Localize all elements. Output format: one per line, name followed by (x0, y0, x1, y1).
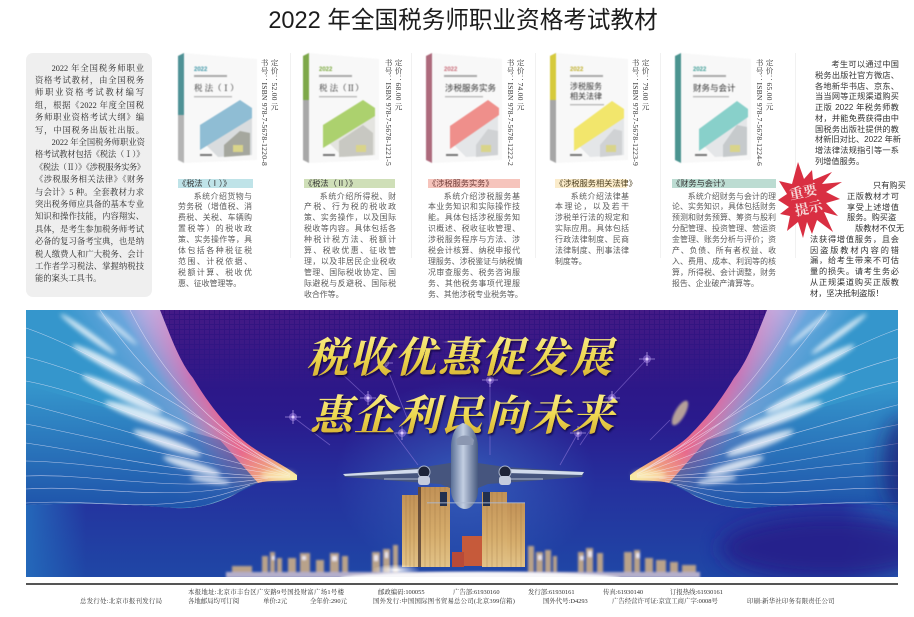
text block: purchase channels: 国税务出版社提供的教 (815, 124, 899, 134)
price and ISBN: 书号：ISBN 978-7-5678-1223-9 (631, 59, 640, 166)
text block: 财务与会计: 产、负债、所有者权益、收 (672, 246, 776, 255)
text block: 涉税服务相关法律: 系统介绍法律基 (571, 192, 629, 200)
footer: publication information: 国外发行:中国国际图书贸易总公司(北京399信箱) (373, 598, 515, 605)
text block: 税法（Ⅱ）: 策、实务操作，以及国际 (304, 213, 396, 222)
text block: 财务与会计: 金管理、账务分析与评价；资 (672, 235, 776, 244)
price and ISBN: 书号：ISBN 978-7-5678-1220-8 (260, 59, 269, 166)
icon: book cover 税法（Ⅰ）: 税 法（Ⅰ） (194, 82, 239, 94)
icon: book cover 涉税服务实务: 涉税服务实务 (445, 83, 497, 93)
text block: 财务与会计: 入、费用、成本、利润等的核 (672, 257, 776, 266)
price and ISBN: 定价：74.00 元 (516, 59, 525, 111)
text block: 涉税服务实务: 识概述、税收征收管理、 (428, 224, 520, 233)
text block: 税法（Ⅰ）: 税额计算、税收优 (178, 268, 252, 277)
text block: introduction: 《涉税服务相关法律》《财务 (35, 175, 144, 184)
text block: purchase channels: 材，并能免费获得由中 (815, 114, 899, 123)
icon: book cover 税法（Ⅰ）: 2022 (194, 67, 208, 73)
full width lines: 漏，给考生带来不可估 (810, 256, 899, 265)
text block: introduction: 工作者学习税法、掌握纳税技 (35, 262, 144, 271)
text block: 税法（Ⅱ）: 理，以及非居民企业税收 (304, 257, 396, 266)
text block: 税法（Ⅱ）: 系统介绍所得税、财 (320, 192, 396, 200)
footer: publication information: 单价:2元 (263, 598, 287, 605)
icon: book cover 税法（Ⅱ） (302, 52, 376, 164)
wrapped lines beside starburst: 版教材不仅无 (855, 224, 904, 233)
text block: introduction: 组，根据《2022 年度全国税 (35, 101, 144, 110)
text block: 财务与会计: 分配管理、投资管理、营运资 (672, 224, 776, 233)
price and ISBN: 定价：68.00 元 (394, 59, 403, 111)
text block: 财务与会计: 算，所得税、会计调整，财务 (672, 268, 776, 277)
text block: 税法（Ⅱ）: 收合作等。 (304, 290, 343, 299)
footer: publication information: 全年价:290元 (310, 598, 347, 605)
ground light arc (340, 564, 620, 577)
text block: purchase channels: 增法律法规指引等一系 (815, 146, 899, 155)
wrapped lines beside starburst: 享受上述增值 (847, 202, 899, 212)
title: 2022 年全国税务师职业资格考试教材 (268, 8, 658, 34)
full width lines: 材，坚决抵制盗版！ (810, 288, 884, 298)
footer: publication information: 本报地址:北京市丰台区广安路9号国投财富广场1号楼 (188, 589, 344, 596)
heading: 税法（Ⅱ） (304, 179, 395, 188)
footer: publication information: 各地邮局均可订阅 (188, 598, 239, 605)
slogan text (308, 336, 620, 437)
left wing (26, 310, 297, 577)
text block: introduction: 能的案头工具书。 (35, 274, 101, 283)
heading: 涉税服务相关法律: 《涉税服务相关法律》 (555, 179, 637, 188)
text block: purchase channels: 税务出版社官方微店、 (815, 71, 899, 80)
text block: 涉税服务相关法律: 行政法律制度、民商 (555, 235, 629, 244)
background gradient (26, 310, 898, 577)
wrapped lines beside starburst (847, 181, 906, 233)
text block: 涉税服务相关法律: 法律制度、刑事法律 (555, 246, 629, 255)
text block: introduction: 与会计》5 种。全套教材力求 (35, 188, 144, 197)
text block: 财务与会计: 论、实务知识，具体包括财务 (672, 202, 776, 211)
heading: 财务与会计: 《财务与会计》 (672, 179, 729, 188)
sparkles and rays (285, 340, 670, 465)
text block: 涉税服务相关法律: 本理论，以及若干 (555, 202, 629, 211)
text block: introduction: 知识和操作技能，内容翔实、 (35, 212, 144, 221)
text block: 税法（Ⅰ）: 劳务税（增值税、消 (178, 202, 252, 211)
text block: 税法（Ⅰ）: 惠、征收管理等。 (178, 279, 241, 288)
price and ISBN (506, 59, 525, 166)
text block: 涉税服务实务 (428, 192, 523, 299)
text block: 涉税服务相关法律: 涉税单行法的规定和 (555, 213, 629, 222)
text block: 税法（Ⅰ）: 策、实务操作等，具 (178, 235, 252, 244)
text block: 涉税服务相关法律 (555, 192, 629, 266)
text block: 涉税服务实务: 本业务知识和实际操作技 (428, 202, 520, 211)
text block: 税法（Ⅰ）: 费税、关税、车辆购 (178, 213, 252, 222)
text block: introduction: 2022 年全国税务师职业资 (52, 138, 145, 147)
panel: introduction (26, 53, 152, 297)
text block: 涉税服务实务: 涉税服务程序与方法、涉 (428, 235, 520, 244)
text block: 税法（Ⅰ）: 范围、计税依据、 (178, 257, 252, 266)
panel: book 4 (549, 52, 650, 266)
price and ISBN (631, 59, 650, 166)
wrapped lines beside starburst: 服务。购买盗 (847, 213, 896, 222)
text block: purchase channels: 当当网等正规渠道购买 (815, 92, 899, 101)
text block: 涉税服务相关法律: 实际应用。具体包括 (555, 224, 629, 233)
price and ISBN: 书号：ISBN 978-7-5678-1222-2 (506, 59, 515, 166)
footer: publication information (80, 588, 835, 605)
icon: red starburst 重要提示: 提示 (793, 195, 825, 221)
footer: publication information: 邮政编码:100055 (378, 589, 425, 596)
price and ISBN: 定价：65.00 元 (765, 59, 774, 111)
footer: publication information: 总发行处:北京市报刊发行局 (80, 598, 162, 605)
text block: 财务与会计: 报告、企业破产清算等。 (672, 279, 759, 288)
footer: publication information: 订报热线:61930161 (670, 589, 723, 596)
footer: publication information: 传真:61930140 (603, 589, 643, 596)
text block: introduction (35, 64, 145, 283)
price and ISBN: 定价：79.00 元 (641, 59, 650, 111)
full width lines: 因盗版教材内容的错 (810, 246, 899, 254)
text block: purchase channels: 列增值服务。 (815, 157, 864, 166)
heading: 财务与会计 (672, 179, 776, 188)
icon: book cover 涉税服务相关法律 (549, 52, 625, 164)
heading: 涉税服务实务: 《涉税服务实务》 (428, 179, 494, 188)
heading: 税法（Ⅱ）: 《税法（Ⅱ）》 (304, 179, 357, 188)
text block: purchase channels: 考生可以通过中国 (831, 60, 899, 69)
text block: 税法（Ⅱ）: 税收等内容。具体包括各 (304, 224, 396, 233)
text block: 财务与会计 (672, 192, 776, 288)
text block: introduction: 《税法（Ⅱ）》《涉税服务实务》 (35, 163, 144, 172)
icon: book cover 涉税服务实务: 2022 (444, 67, 458, 73)
icon: book cover 财务与会计: 财务与会计 (693, 83, 736, 93)
wrapped lines beside starburst: 正版教材才可 (847, 192, 899, 201)
footer: publication information: 发行部:61930161 (528, 589, 575, 596)
text block: introduction: 务师职业资格考试大纲》编 (35, 113, 144, 122)
footer: publication information: 广告经营许可证:京宣工商广字:0008号 (612, 598, 718, 605)
footer: publication information: 印刷:新华社印务有限责任公司 (747, 598, 835, 605)
text block: 税法（Ⅱ）: 际避税与反避税、国际税 (304, 279, 396, 288)
text block: introduction: 2022 年全国税务师职业 (52, 64, 144, 72)
city skyline (226, 545, 700, 578)
icon: red starburst 重要提示 (778, 162, 842, 238)
text block: 涉税服务实务: 理服务、涉税鉴证与纳税情 (428, 257, 523, 266)
text block: 涉税服务实务: 务、其他税务事项代理服 (428, 279, 520, 288)
icon: red starburst 重要提示: 重要 (787, 179, 820, 205)
footer: publication information: 国外代号:D4293 (543, 598, 588, 605)
airplane (343, 423, 584, 509)
text block: 税法（Ⅰ）: 置税等）的税收政 (178, 224, 252, 233)
text block: introduction: 必备的复习备考宝典，也是纳 (35, 237, 144, 246)
icon: book cover 涉税服务相关法律: 相关法律 (570, 91, 602, 101)
text block: anti-piracy notice (810, 181, 906, 298)
full width lines: 法获得增值服务，且会 (810, 235, 899, 244)
icon: book cover 税法（Ⅱ）: 2022 (319, 67, 333, 73)
text block: 涉税服务实务: 系统介绍涉税服务基 (444, 192, 520, 200)
price and ISBN (260, 59, 279, 166)
text block: 涉税服务相关法律: 制度等。 (555, 257, 587, 266)
wrapped lines beside starburst: 只有购买 (873, 181, 906, 190)
panel: book 1 (177, 52, 279, 288)
price and ISBN (384, 59, 403, 166)
text block: purchase channels: 正版 2022 年税务师教 (815, 103, 899, 112)
text block: purchase channels (815, 60, 901, 166)
text block: 财务与会计: 预测和财务预算、筹资与股利 (672, 213, 776, 222)
panel: book 5 (672, 52, 776, 288)
icon: book cover 财务与会计 (674, 52, 749, 164)
panel: book 3 (425, 52, 525, 299)
icon: book cover 涉税服务实务 (425, 52, 500, 164)
panel: book 2 (302, 52, 403, 299)
text block: 税法（Ⅰ）: 系统介绍货物与 (194, 192, 252, 200)
text block: 涉税服务实务: 务、其他涉税专业税务等。 (428, 290, 523, 299)
icon: book cover 税法（Ⅱ）: 税 法（Ⅱ） (319, 82, 364, 94)
price and ISBN: 书号：ISBN 978-7-5678-1221-5 (384, 59, 393, 166)
text block: 税法（Ⅰ）: 体包括各种税征税 (178, 246, 252, 255)
text block: 税法（Ⅰ） (178, 192, 252, 288)
price and ISBN: 定价：52.00 元 (270, 59, 279, 111)
full width lines: 从正规渠道购买正版教 (810, 278, 899, 287)
text block: introduction: 师职业资格考试教材编写 (35, 88, 144, 97)
slogan text: 惠企利民向未来 (310, 383, 618, 443)
text block: 税法（Ⅱ）: 种税计税方法、税额计 (304, 235, 396, 244)
text block: purchase channels: 各地新华书店、京东、 (815, 82, 899, 90)
text block: introduction: 突出税务师应具备的基本专业 (35, 200, 144, 209)
text block: 涉税服务实务: 能。具体包括涉税服务知 (428, 213, 520, 222)
icon: book cover 涉税服务相关法律: 涉税服务 (570, 81, 602, 91)
text block: introduction: 资格考试教材，由全国税务 (35, 76, 144, 85)
text block: purchase channels: 材新旧对比、2022 年新 (815, 135, 901, 144)
icon: book cover 税法（Ⅰ） (177, 52, 253, 164)
price and ISBN (755, 59, 774, 166)
slogan text: 税收优惠促发展 (306, 325, 618, 385)
icon: book cover 财务与会计: 2022 (693, 67, 707, 73)
footer: publication information: 广告部:61930160 (453, 589, 500, 596)
heading: 税法（Ⅰ）: 《税法（Ⅰ）》 (178, 179, 231, 188)
text block: 税法（Ⅱ）: 产税、行为税的税收政 (304, 202, 396, 211)
text block: introduction: 具体，是考生参加税务师考试 (35, 225, 144, 234)
text block: 税法（Ⅱ）: 算、税收优惠、征收管 (304, 246, 396, 255)
icon: book cover 涉税服务相关法律: 2022 (570, 67, 584, 73)
text block: introduction: 格考试教材包括《税法（Ⅰ）》 (35, 150, 144, 159)
price and ISBN: 书号：ISBN 978-7-5678-1224-6 (755, 59, 764, 166)
text block: 税法（Ⅱ） (304, 192, 396, 299)
full width lines: 量的损失。请考生务必 (810, 267, 899, 276)
text block: 涉税服务实务: 税会计核算、纳税申报代 (428, 246, 520, 255)
text block: 税法（Ⅱ）: 管理、国际税收协定、国 (304, 268, 396, 277)
text block: introduction: 税人缴费人和广大税务、会计 (35, 250, 144, 259)
text block: 涉税服务实务: 况审查服务、税务咨询服 (428, 268, 520, 277)
footer rule (26, 583, 898, 585)
text block: introduction: 写，中国税务出版社出版。 (35, 126, 144, 135)
text block: 财务与会计: 系统介绍财务与会计的理 (688, 192, 776, 200)
buildings (402, 487, 525, 567)
banner (26, 310, 898, 577)
full width lines (810, 235, 899, 298)
right wing (630, 310, 901, 577)
